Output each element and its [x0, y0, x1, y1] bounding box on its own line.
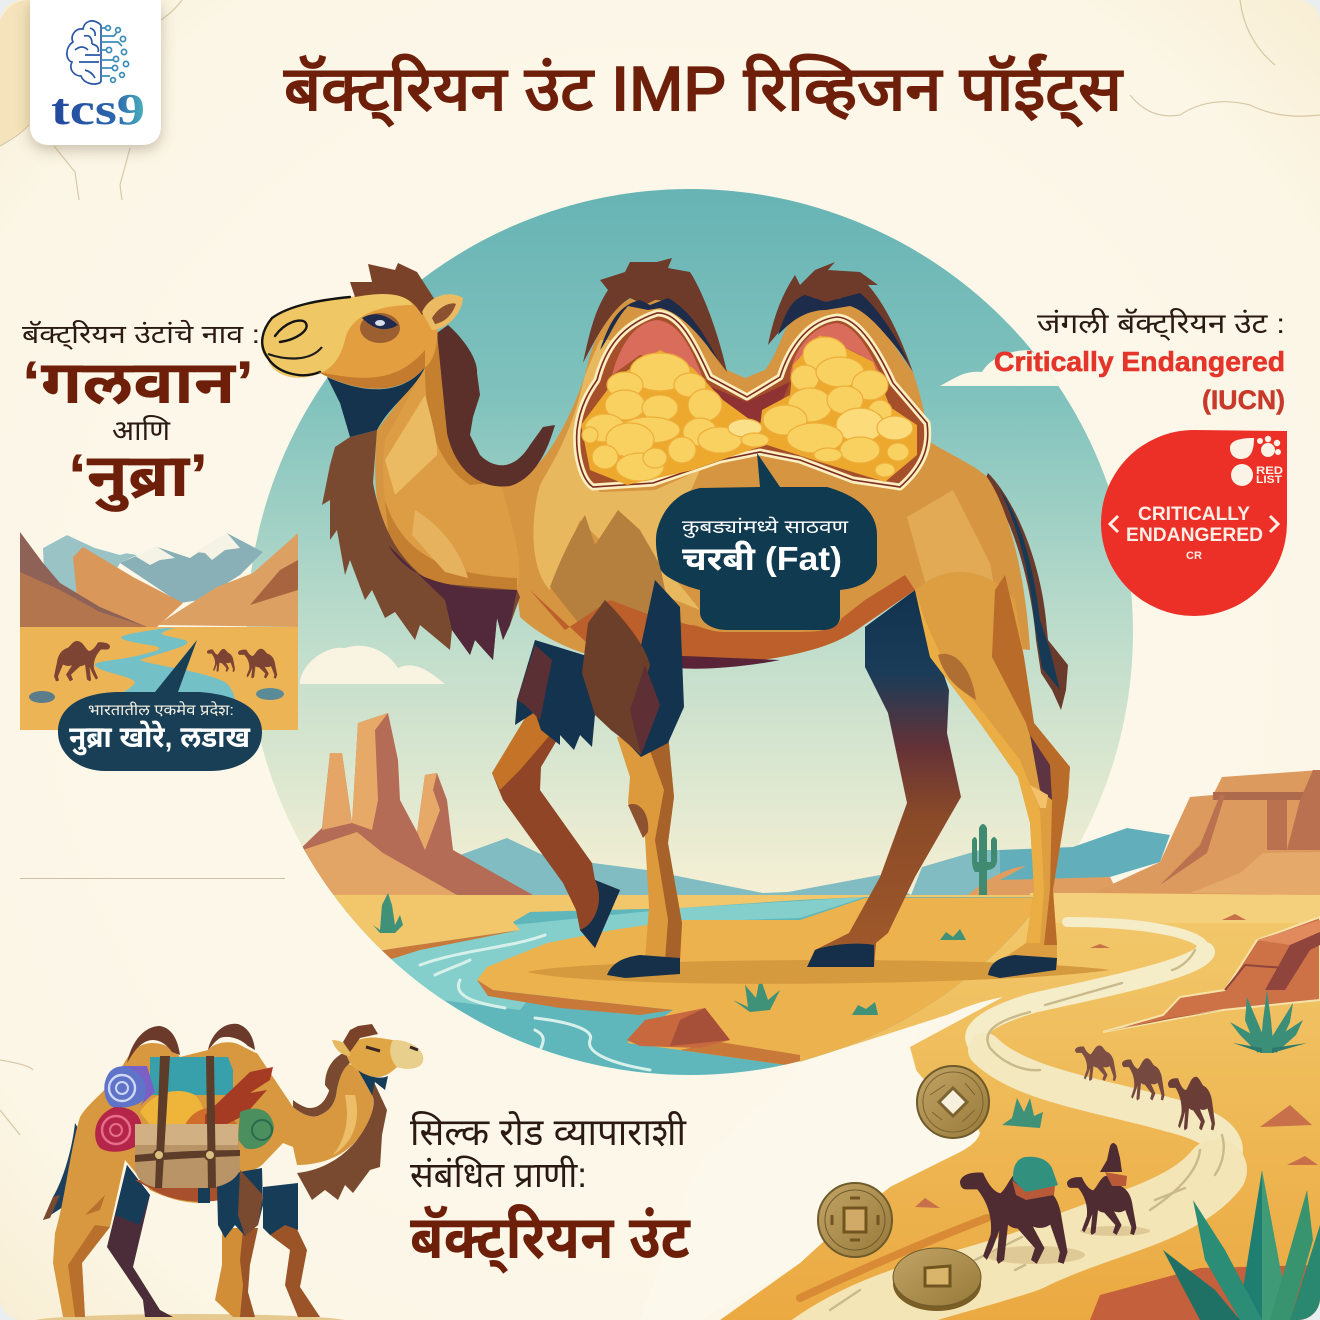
red list badge: [1101, 430, 1287, 616]
valley orange mountain: [73, 547, 183, 627]
straps: [135, 1056, 240, 1188]
logo card: [30, 0, 161, 145]
pack camel ground: [30, 1314, 350, 1320]
hind leg inner shadow: [1030, 735, 1052, 800]
status code: CR: [1186, 550, 1202, 562]
name galwan: ‘गलवान’: [22, 349, 254, 416]
name label: बॅक्ट्रियन उंटांचे नाव :: [22, 319, 260, 350]
corner rock: [1090, 1265, 1320, 1320]
near hind patch: [938, 654, 976, 700]
teal roll: [150, 1057, 233, 1095]
pack camel far front leg: [263, 1183, 320, 1317]
throat dark: [327, 367, 425, 437]
pack camel muzzle: [390, 1040, 423, 1069]
valley floor: [20, 627, 298, 730]
valley right mountain: [157, 533, 298, 627]
logo wordmark: tcs9: [51, 85, 145, 134]
scene foreground in circle: [302, 713, 1033, 1075]
and: आणि: [112, 414, 171, 446]
pack camel eye and nose: [366, 1047, 418, 1051]
camel tail: [985, 473, 1068, 710]
valley snow: [135, 533, 240, 565]
hind hoof: [988, 955, 1057, 978]
pack camel neck highlight: [333, 1095, 357, 1155]
hump left dark band: [600, 298, 718, 360]
near hind highlight: [1030, 785, 1048, 808]
right mesa: [1093, 770, 1320, 895]
peninsula rust edge: [477, 980, 673, 1015]
pack camel far hind leg: [107, 1165, 173, 1317]
main scene circle: [240, 180, 1140, 900]
pack camel belly: [135, 1180, 240, 1202]
yellow bundle: [140, 1091, 210, 1125]
sky: [240, 180, 1140, 900]
name nubra: ‘नुब्रा’: [68, 442, 208, 513]
valley line 2: नुब्रा खोरे, लडाख: [69, 719, 251, 756]
near hind dark strip: [992, 575, 1070, 945]
fat mass: [581, 335, 917, 485]
green roll: [238, 1109, 274, 1149]
belly rust band: [530, 575, 915, 668]
silk road trail: [800, 922, 1226, 1320]
valley rocks: [29, 691, 55, 703]
mouth: [268, 347, 322, 358]
valley line 1: भारतातील एकमेव प्रदेश:: [88, 701, 234, 719]
coin 3: [893, 1248, 981, 1311]
near front fur: [582, 580, 684, 757]
red list icons: [1230, 436, 1281, 486]
valley dark mountain left: [20, 532, 147, 627]
sand base strip horizon: [1030, 893, 1320, 923]
belly dark: [660, 655, 780, 669]
head: [261, 293, 438, 389]
divider: [20, 878, 285, 879]
pink cavities: [612, 320, 883, 380]
pack camel rear mane: [325, 1052, 350, 1098]
status endangered: ENDANGERED: [1126, 524, 1263, 546]
pack camel body: [53, 1042, 373, 1317]
coin 2: [818, 1183, 892, 1257]
near hind light edge: [915, 590, 1044, 943]
bank rust edge: [382, 930, 520, 959]
fat pouch: [577, 313, 928, 487]
caravan near camels: [960, 1143, 1136, 1264]
valley blue mountains: [120, 533, 263, 603]
deep red gap: [700, 382, 790, 440]
blue hill beyond circle: [1000, 828, 1170, 885]
sand ground right: [720, 897, 1320, 1320]
agave top right: [1230, 990, 1307, 1053]
basket: [135, 1124, 240, 1188]
large rock right: [1103, 917, 1320, 1032]
silk line 2: संबंधित प्राणी:: [410, 1155, 587, 1195]
river ripples: [420, 935, 650, 1070]
valley far mountains left: [43, 535, 137, 600]
far front leg: [492, 640, 620, 948]
pack camel neck underside: [293, 1080, 337, 1116]
red list badge: LIST: [1256, 474, 1282, 486]
desert plants: [373, 893, 966, 1015]
neck highlights: [385, 395, 437, 495]
bubble line 1: कुबड्यांमध्ये साठवण: [682, 516, 849, 539]
IUCN: (IUCN): [1202, 385, 1285, 415]
river light side: [360, 897, 865, 1010]
status: Critically Endangered: [994, 346, 1285, 377]
hump left hair: [583, 258, 727, 372]
upper sand bank: [334, 895, 1033, 950]
pack camel hair: [343, 1024, 378, 1052]
eye: [360, 313, 400, 343]
pack camel illustration: [30, 1024, 423, 1320]
jaw shade: [318, 350, 425, 389]
near front leg: [607, 733, 682, 978]
camel body: [375, 287, 1030, 668]
coin 1: [917, 1066, 989, 1138]
chevrons: [1110, 516, 1278, 532]
red list wordmark: RED: [1256, 465, 1283, 477]
sand plants: [1002, 1098, 1043, 1128]
pack camel head: [345, 1038, 423, 1077]
muzzle light: [261, 293, 412, 378]
right status text: [994, 307, 1285, 415]
fat callout bubble: [656, 453, 877, 630]
valley camels: [54, 641, 277, 681]
pack camel tail: [43, 1123, 85, 1220]
hump right hair: [768, 262, 913, 372]
neck rear mane: [437, 325, 555, 487]
blue roll: [104, 1066, 150, 1108]
caravan far camels: [1075, 1045, 1215, 1130]
hump right dark band: [778, 293, 908, 362]
caravan shadows: [985, 1226, 1150, 1264]
left heading block: [22, 319, 260, 513]
silk answer: बॅक्ट्रियन उंट: [410, 1204, 692, 1274]
load: [1013, 1157, 1058, 1192]
left mesa rocks: [297, 713, 533, 895]
cloud right: [940, 350, 1070, 386]
pack camel near front leg: [215, 1168, 263, 1317]
river water base: [335, 897, 1033, 1075]
ear: [422, 294, 463, 330]
title: बॅक्ट्रियन उंट IMP रिव्हिजन पॉईंट्स: [284, 54, 1123, 127]
fat lumps: [582, 337, 913, 481]
Nubra valley inset: [20, 532, 298, 771]
rear thigh light: [907, 490, 1005, 650]
neck light: [383, 333, 519, 590]
body light around pouch: [533, 340, 700, 610]
pack camel hump hair: [127, 1024, 255, 1063]
small rocks: [915, 914, 1318, 1208]
top hair: [350, 263, 435, 315]
neck orange rear strip: [425, 333, 500, 485]
cloud left: [300, 646, 445, 684]
pouch inner rim: [577, 313, 928, 487]
status critically: CRITICALLY: [1138, 503, 1250, 525]
near hind leg: [915, 572, 1070, 978]
ground shadow under camel: [527, 960, 1110, 984]
pack camel rear shading: [68, 1195, 110, 1317]
front beard: [322, 430, 520, 660]
lower beard dark: [388, 545, 517, 660]
wild camel label: जंगली बॅक्ट्रियन उंट :: [1037, 307, 1285, 341]
main camel illustration: [261, 258, 1070, 978]
low orange hill: [968, 866, 1114, 895]
silk line 1: सिल्क रोड व्यापाराशी: [410, 1110, 687, 1154]
orange bundle: [185, 1108, 238, 1125]
pack camel ear: [332, 1040, 350, 1056]
rider: [1100, 1143, 1122, 1172]
valley callout bubble: [58, 640, 262, 771]
agave bottom right: [1163, 1170, 1320, 1320]
pack cargo: [95, 1056, 274, 1188]
far hind leg: [807, 590, 961, 967]
trail ruts: [830, 950, 1224, 1310]
muzzle outline: [262, 297, 350, 375]
rock: [627, 1008, 730, 1048]
red roll: [95, 1107, 142, 1152]
aged map region top left: [0, 0, 30, 146]
pack camel front mane: [297, 1068, 387, 1200]
cactus: [972, 824, 997, 895]
silk road text: [410, 1110, 692, 1274]
cream inlet over sand: [798, 997, 1002, 1264]
bubble line 2: चरबी (Fat): [682, 540, 842, 577]
neck orange band: [385, 500, 517, 590]
distant mountains: [461, 838, 1000, 895]
shoulder brown: [550, 510, 690, 640]
pack camel throat: [358, 1070, 388, 1095]
logo brain icon: [67, 21, 129, 84]
sand peninsula: [477, 897, 1033, 1065]
valley river: [60, 628, 235, 730]
spice sticks: [205, 1067, 273, 1125]
